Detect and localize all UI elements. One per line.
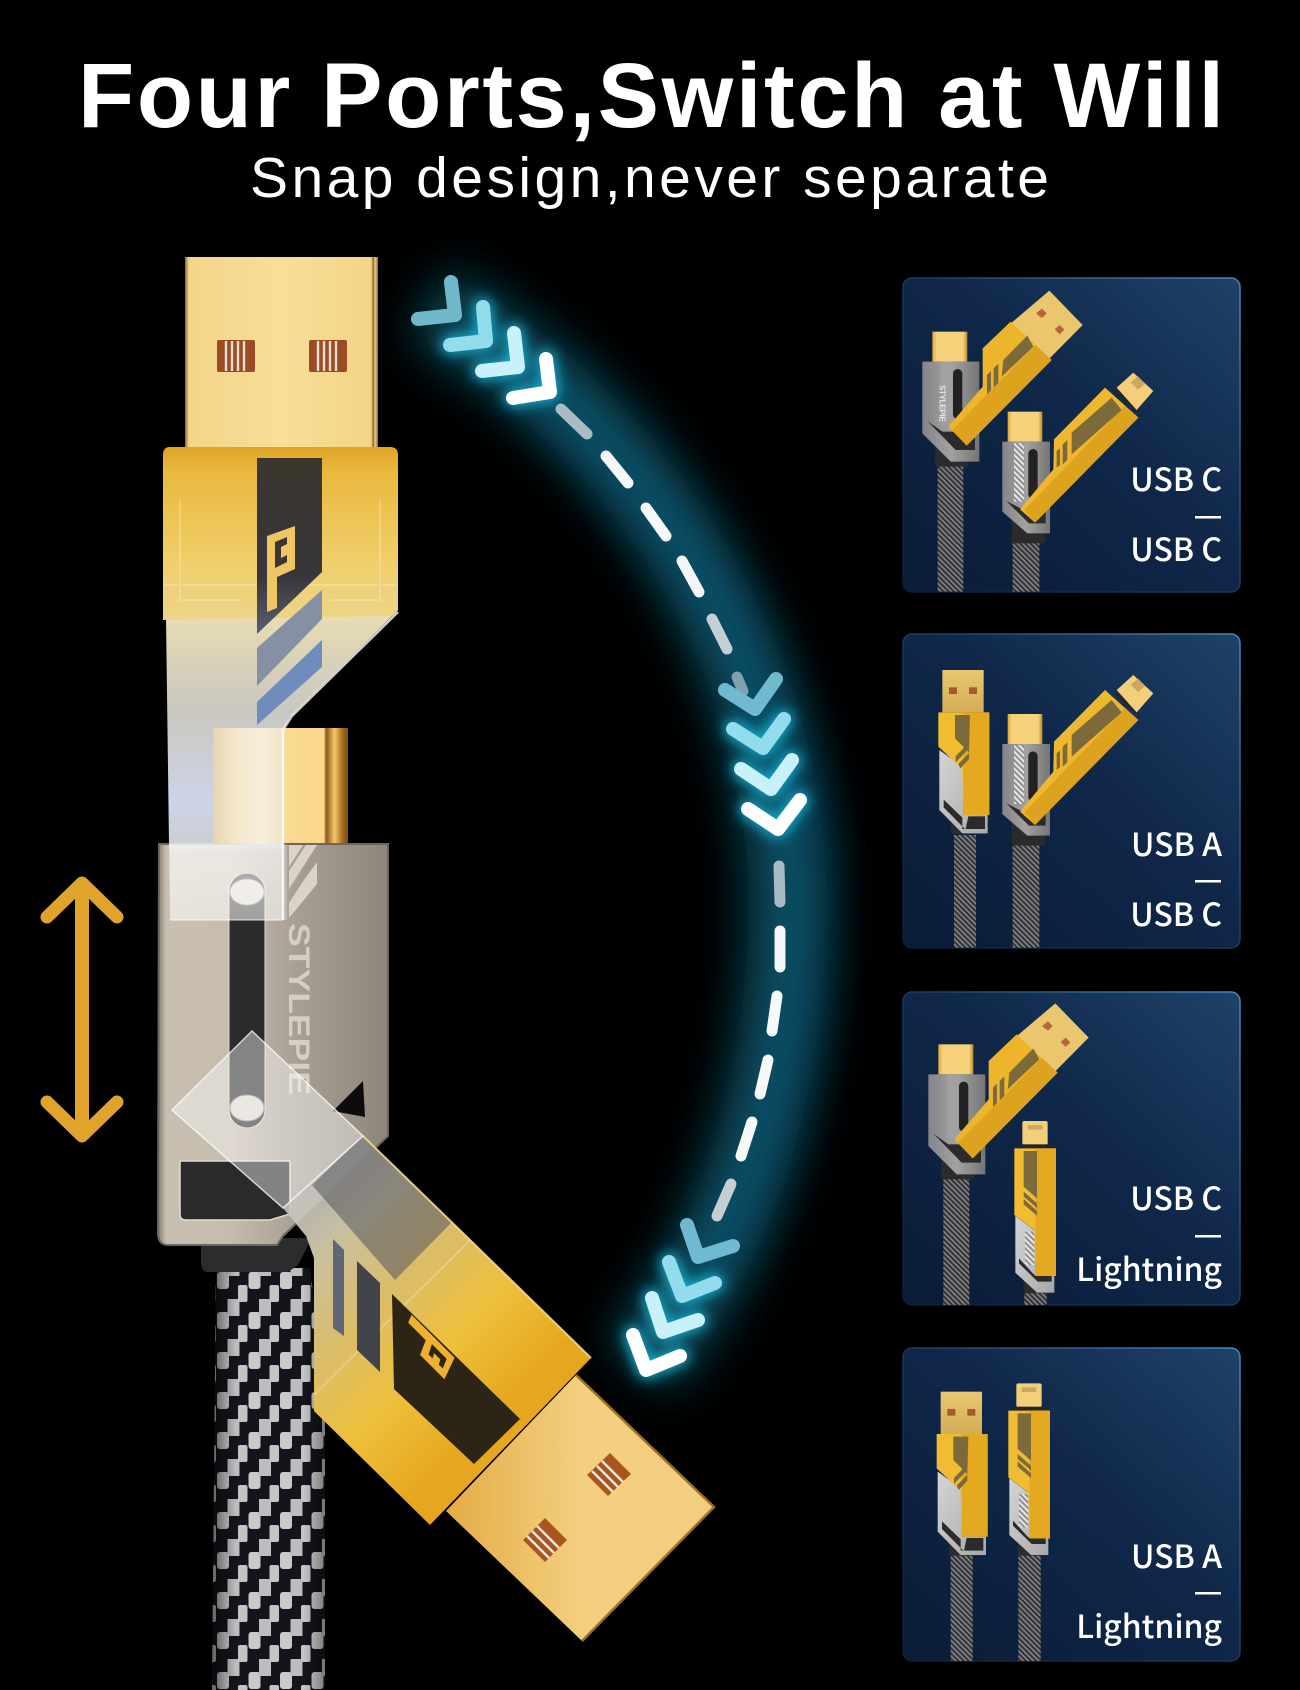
arc inner blue glow bbox=[530, 380, 805, 1280]
title: Four Ports,Switch at Will bbox=[78, 45, 1224, 147]
brand text: STYLEPIE bbox=[282, 923, 315, 1095]
USB-A plug, rotated bbox=[446, 1375, 714, 1641]
black badge bbox=[257, 458, 322, 634]
shell logo bbox=[396, 1315, 460, 1379]
subtitle: Snap design,never separate bbox=[250, 146, 1049, 210]
clear tab, upper bbox=[170, 844, 287, 920]
top chevrons bbox=[418, 282, 550, 398]
label: USB A bbox=[1131, 820, 1222, 866]
cables pair bbox=[938, 670, 1153, 948]
main 4-in-1 connector illustration bbox=[158, 257, 714, 1690]
label dash bbox=[1195, 880, 1221, 882]
bottom chevrons bbox=[633, 1225, 733, 1370]
contact window 2 bbox=[523, 1518, 567, 1562]
slider pin top bbox=[230, 879, 264, 905]
slider slot bbox=[229, 873, 265, 1128]
badge stripes bbox=[257, 590, 322, 686]
label: USB C bbox=[1130, 455, 1222, 501]
label: Lightning bbox=[1076, 1602, 1222, 1648]
label: USB C bbox=[1130, 1174, 1222, 1220]
black collar bbox=[201, 1238, 312, 1272]
clear tab bbox=[172, 1031, 363, 1208]
label dash bbox=[1195, 1235, 1221, 1238]
chevron halo bbox=[450, 307, 800, 1370]
USB-C plug bbox=[213, 728, 348, 846]
panel: USB A to Lightning bbox=[903, 1348, 1240, 1661]
cables pair bbox=[937, 1383, 1050, 1661]
metal body bbox=[158, 844, 388, 1245]
dashed arc, upper bbox=[561, 409, 743, 691]
shell dark badge bbox=[392, 1294, 520, 1464]
panel: USB C to Lightning bbox=[903, 992, 1240, 1305]
logo mark bbox=[267, 526, 295, 612]
cables pair bbox=[922, 291, 1153, 592]
USB-A plug, upper bbox=[185, 257, 378, 449]
body right window bbox=[333, 1081, 365, 1117]
arrow: vertical double-headed slide arrow bbox=[47, 883, 117, 1136]
label dash bbox=[1195, 1592, 1221, 1594]
transparent yellow shell, upper bbox=[163, 447, 398, 920]
cables pair bbox=[928, 1003, 1089, 1305]
arc glow bbox=[430, 305, 787, 1365]
label: USB C bbox=[1130, 525, 1222, 571]
slider pin bottom bbox=[230, 1095, 264, 1121]
label: USB C bbox=[1130, 890, 1222, 936]
body lower slot bbox=[180, 1161, 290, 1220]
label: USB A bbox=[1131, 1532, 1222, 1578]
transparent yellow shell, rotated bbox=[172, 1031, 591, 1525]
slash marks bbox=[289, 845, 317, 918]
contact window 1 bbox=[587, 1453, 631, 1496]
braided cable bbox=[212, 1268, 325, 1690]
cables pair: STYLEPIE bbox=[937, 385, 946, 422]
glowing rotation arc bbox=[418, 282, 805, 1370]
panel: USB C to USB C bbox=[903, 278, 1240, 592]
panel: USB A to USB C bbox=[903, 634, 1240, 948]
label: Lightning bbox=[1076, 1245, 1222, 1291]
middle chevrons bbox=[725, 679, 800, 829]
dashed arc, lower bbox=[717, 866, 780, 1216]
label dash bbox=[1195, 516, 1221, 518]
contact windows bbox=[217, 340, 255, 372]
shell stripes bbox=[333, 1239, 344, 1336]
